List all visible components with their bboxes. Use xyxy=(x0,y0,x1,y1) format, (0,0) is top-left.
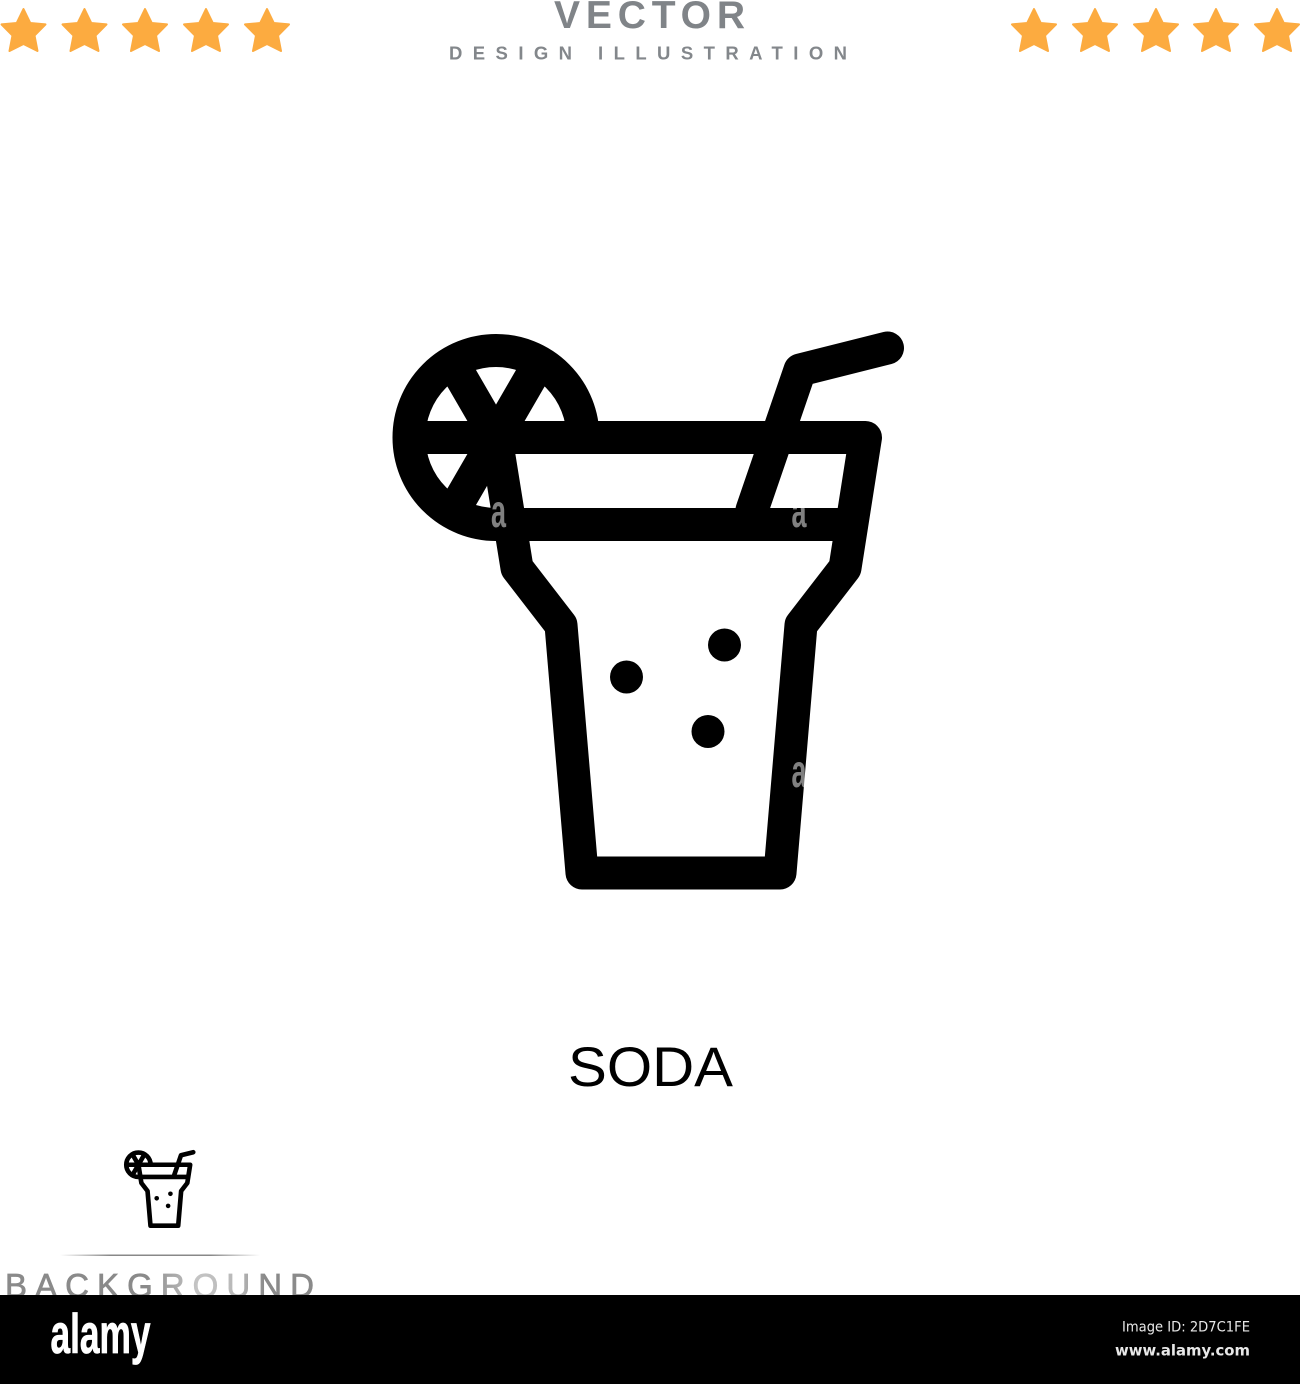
watermark letters over icon xyxy=(491,485,807,797)
watermark letters over icon: a xyxy=(491,485,506,537)
footer text: website: www.alamy.com xyxy=(1115,1342,1250,1360)
watermark letters over icon: a xyxy=(792,485,807,537)
stars: right rating row xyxy=(1012,9,1299,51)
footer logo: alamy: alamy xyxy=(50,1302,150,1365)
footer text: image id: Image ID: 2D7C1FE xyxy=(1122,1320,1250,1336)
glass outline with rim xyxy=(410,438,866,873)
label: SODA: SODA xyxy=(568,1035,734,1098)
icon: soda glass, large xyxy=(409,348,888,873)
icon: soda glass, small xyxy=(126,1152,193,1226)
label: BACKGROUND: BACKGROUND xyxy=(5,1267,314,1304)
footer bar xyxy=(0,1295,1300,1384)
lemon slice xyxy=(409,350,583,524)
thin line under small icon xyxy=(60,1254,260,1256)
soda bubbles xyxy=(610,628,741,748)
liquid level line xyxy=(506,508,851,541)
stars: left rating row xyxy=(2,9,289,51)
subheading: design illustration: DESIGN ILLUSTRATION xyxy=(449,42,847,64)
straw xyxy=(752,348,888,510)
watermark letters over icon: a xyxy=(792,745,807,797)
